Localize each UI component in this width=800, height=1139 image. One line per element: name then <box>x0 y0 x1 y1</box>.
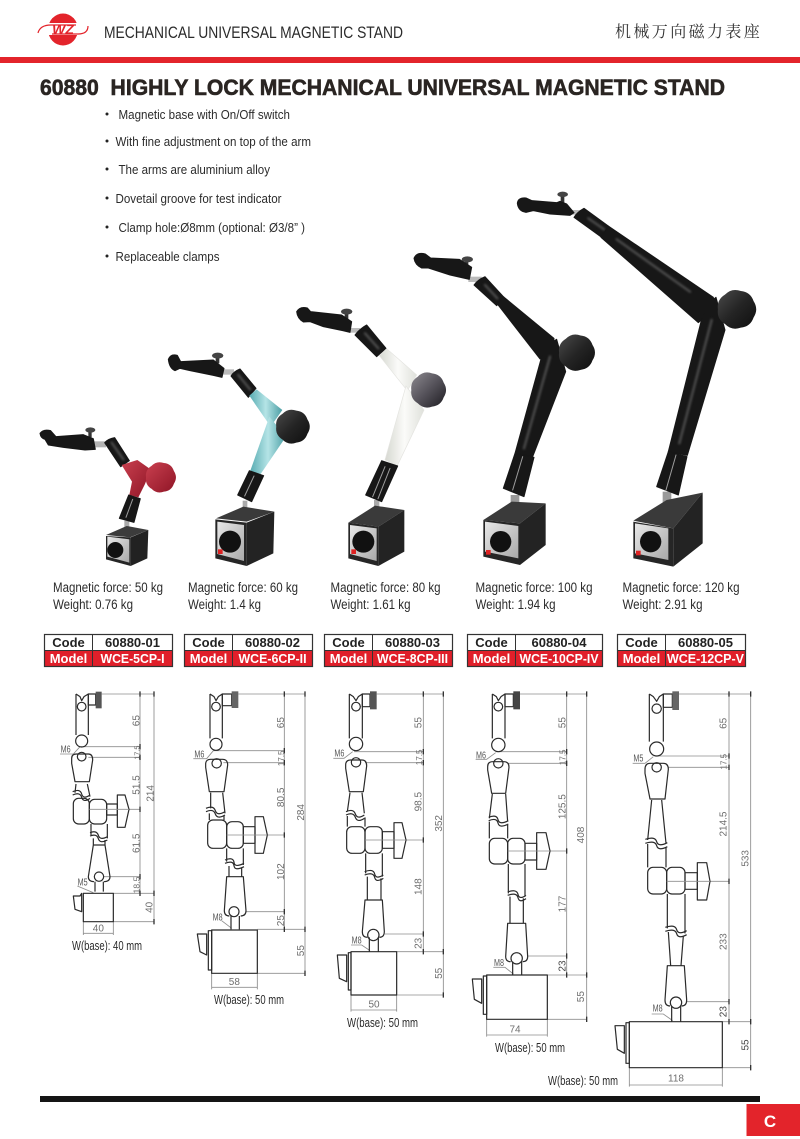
drawing: 60880-05: 233 <box>719 933 730 950</box>
drawing: 60880-03: 98.5 <box>414 792 425 811</box>
table 60880-04: Model <box>473 651 510 666</box>
drawing: 60880-04: M6 <box>476 751 486 762</box>
drawing: 60880-05: M5 <box>633 753 644 764</box>
drawing: 60880-04: 74 <box>509 1024 521 1035</box>
drawing: 60880-04: 125.5 <box>557 794 568 819</box>
header <box>38 14 762 46</box>
table 60880-02: 60880-02 <box>245 635 300 650</box>
red header bar <box>0 57 800 63</box>
drawing: 60880-02: M8 <box>213 913 223 924</box>
table 60880-03: WCE-8CP-III <box>377 651 448 666</box>
drawing: 60880-03: 50 <box>368 999 380 1010</box>
drawing: 60880-02: 102 <box>276 863 287 880</box>
table 60880-05: Code <box>625 635 658 650</box>
drawing: 60880-04: 17.5 <box>558 749 567 765</box>
drawing: 60880-01: 65 <box>131 715 142 726</box>
drawing: 60880-03: M6 <box>334 749 345 760</box>
specs 60880-01: Weight: 0.76 kg <box>53 597 133 612</box>
table 60880-05 <box>618 634 746 666</box>
photo: stand 60880-03 <box>297 307 446 566</box>
table 60880-04: 60880-04 <box>532 635 587 650</box>
drawing: 60880-05: 533 <box>740 850 751 867</box>
drawing: 60880-02: 25 <box>276 915 287 926</box>
drawing: 60880-05: M8 <box>653 1004 663 1015</box>
specs 60880-03 <box>330 580 440 612</box>
label: W(base) 40 mm: W(base): 40 mm <box>72 939 142 953</box>
main title: 60880 HIGHLY LOCK MECHANICAL UNIVERSAL MAGNETIC STAND <box>40 75 725 100</box>
table 60880-03 <box>324 634 452 666</box>
drawing: 60880-04: 23 <box>557 960 568 972</box>
table 60880-04: Code <box>475 635 508 650</box>
specs 60880-05: Weight: 2.91 kg <box>622 597 702 612</box>
drawing: 60880-02: 55 <box>296 945 307 956</box>
feature list: Dovetail groove for test indicator <box>116 191 282 206</box>
photo: stand 60880-02 <box>168 353 310 566</box>
specs 60880-05 <box>622 580 740 612</box>
table 60880-01: Model <box>50 651 87 666</box>
drawing: 60880-02 <box>193 691 307 989</box>
drawing: 60880-02: 284 <box>296 804 307 821</box>
drawing: 60880-02: M6 <box>194 749 205 760</box>
drawing: 60880-03: 55 <box>414 717 425 728</box>
drawing: 60880-04: M8 <box>494 958 504 969</box>
table 60880-02: Model <box>190 651 227 666</box>
feature list <box>106 107 311 264</box>
label: W(base) 50 mm: W(base): 50 mm <box>495 1041 565 1055</box>
table 60880-03: 60880-03 <box>385 635 440 650</box>
drawing: 60880-01: 51.5 <box>131 775 142 795</box>
drawing: 60880-05: 118 <box>668 1074 684 1085</box>
table 60880-01: 60880-01 <box>105 635 160 650</box>
table 60880-05: 60880-05 <box>678 635 733 650</box>
specs 60880-01: Magnetic force: 50 kg <box>53 580 163 595</box>
drawing: 60880-04: 408 <box>576 826 587 843</box>
drawing: 60880-03: 352 <box>434 815 445 832</box>
label: W(base) 50 mm: W(base): 50 mm <box>214 993 284 1007</box>
table 60880-01 <box>44 634 172 666</box>
specs 60880-03: Weight: 1.61 kg <box>330 597 410 612</box>
table 60880-05: Model <box>623 651 660 666</box>
drawing: 60880-02: 65 <box>276 717 287 728</box>
table 60880-04 <box>468 634 602 666</box>
drawing: 60880-01: 18.5 <box>131 876 141 893</box>
specs 60880-01 <box>53 580 163 612</box>
page tab C <box>746 1104 800 1136</box>
photo: stand 60880-05 <box>517 192 756 567</box>
drawing: 60880-05: 23 <box>719 1006 730 1017</box>
drawing: 60880-04: 177 <box>557 895 568 912</box>
photo: stand 60880-01 <box>40 427 176 566</box>
drawing: 60880-01: M5 <box>78 877 88 888</box>
drawing: 60880-02: 58 <box>229 977 240 988</box>
table 60880-01: Code <box>52 635 85 650</box>
drawing: 60880-03: 148 <box>414 878 425 895</box>
photo: stand 60880-04 <box>414 253 595 565</box>
feature list: Clamp hole:Ø8mm (optional: Ø3/8” ) <box>118 220 305 235</box>
drawing: 60880-05 <box>615 691 751 1087</box>
drawing: 60880-01: M6 <box>61 745 71 756</box>
header title chinese: 机械万向磁力表座 <box>615 22 762 41</box>
drawing: 60880-01: 61.5 <box>131 833 142 853</box>
table 60880-04: WCE-10CP-IV <box>520 651 599 666</box>
specs 60880-04: Magnetic force: 100 kg <box>476 580 592 595</box>
feature list: Magnetic base with On/Off switch <box>118 107 290 122</box>
specs 60880-02: Weight: 1.4 kg <box>188 597 261 612</box>
drawing: 60880-04: 55 <box>576 991 587 1002</box>
footer black bar <box>40 1096 760 1102</box>
table 60880-05: WCE-12CP-V <box>667 651 744 666</box>
drawing: 60880-01: 40 <box>145 901 156 913</box>
feature list: Replaceable clamps <box>116 249 220 264</box>
label: W(base) 50 mm: W(base): 50 mm <box>548 1074 618 1088</box>
drawing: 60880-01: 214 <box>145 785 156 802</box>
drawing: 60880-05: 65 <box>719 717 730 729</box>
icon: WZ logo: WZ <box>52 21 74 37</box>
specs 60880-02: Magnetic force: 60 kg <box>188 580 298 595</box>
icon: WZ logo <box>38 14 88 46</box>
drawing: 60880-02: 17.5 <box>277 750 286 766</box>
drawing: 60880-01: 17.5 <box>132 746 141 760</box>
drawing: 60880-01 <box>60 691 156 935</box>
drawing: 60880-04: 55 <box>557 717 568 728</box>
feature list: With fine adjustment on top of the arm <box>116 134 311 149</box>
drawing: 60880-02: 80.5 <box>276 787 287 807</box>
specs 60880-04 <box>476 580 592 612</box>
header title: MECHANICAL UNIVERSAL MAGNETIC STAND <box>104 23 403 42</box>
table 60880-01: WCE-5CP-I <box>100 651 164 666</box>
feature list: The arms are aluminium alloy <box>118 162 270 177</box>
label: W(base) 50 mm: W(base): 50 mm <box>347 1016 418 1030</box>
table 60880-03: Model <box>330 651 367 666</box>
drawing: 60880-03: 23 <box>414 937 425 949</box>
specs 60880-03: Magnetic force: 80 kg <box>330 580 440 595</box>
page tab C: C <box>764 1112 776 1131</box>
drawing: 60880-01: 40 <box>93 924 104 935</box>
specs 60880-02 <box>188 580 298 612</box>
drawing: 60880-03 <box>333 691 445 1012</box>
specs 60880-04: Weight: 1.94 kg <box>476 597 556 612</box>
table 60880-02 <box>184 634 312 666</box>
table 60880-03: Code <box>332 635 365 650</box>
drawing: 60880-05: 17.5 <box>720 753 729 769</box>
drawing: 60880-03: 55 <box>434 967 445 979</box>
table 60880-02: Code <box>192 635 225 650</box>
drawing: 60880-04 <box>472 691 587 1037</box>
specs 60880-05: Magnetic force: 120 kg <box>622 580 740 595</box>
table 60880-02: WCE-6CP-II <box>238 651 306 666</box>
drawing: 60880-03: 17.5 <box>415 749 424 765</box>
drawing: 60880-05: 55 <box>740 1039 751 1051</box>
drawing: 60880-03: M8 <box>352 935 362 946</box>
drawing: 60880-05: 214.5 <box>719 811 730 836</box>
